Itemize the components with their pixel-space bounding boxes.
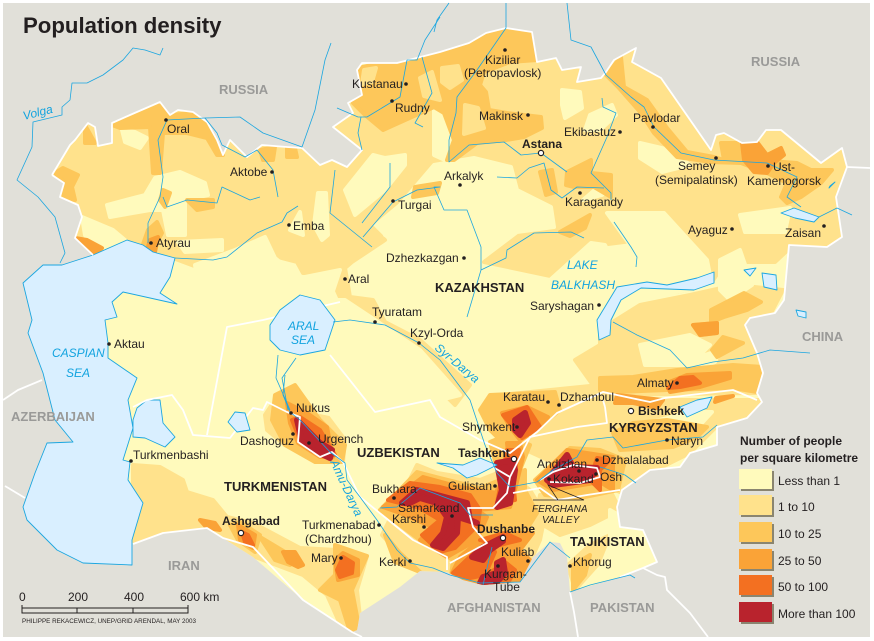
city labels: Samarkand bbox=[398, 501, 459, 515]
city labels: Aral bbox=[348, 272, 369, 286]
city labels: Dzhalalabad bbox=[602, 453, 669, 467]
city labels: Turkmenabad bbox=[302, 518, 376, 532]
water labels: Syr-Darya bbox=[432, 341, 483, 386]
title: Population density bbox=[23, 13, 222, 38]
capital markers bbox=[238, 150, 634, 541]
legend: 25 to 50: 25 to 50 bbox=[778, 554, 822, 568]
city labels: Aktobe bbox=[230, 165, 268, 179]
city labels: Aktau bbox=[114, 337, 145, 351]
city labels bbox=[114, 53, 822, 594]
city labels: Almaty bbox=[637, 376, 674, 390]
legend title: Number of people bbox=[740, 434, 842, 448]
capital labels: Bishkek bbox=[638, 404, 684, 418]
city labels: Tyuratam bbox=[372, 305, 422, 319]
scale bar: 200 bbox=[68, 590, 88, 604]
country name labels: TAJIKISTAN bbox=[570, 534, 645, 549]
country name labels: UZBEKISTAN bbox=[357, 445, 440, 460]
city labels: Saryshagan bbox=[530, 299, 594, 313]
city labels: Urgench bbox=[318, 432, 363, 446]
neighbouring country labels: RUSSIA bbox=[751, 54, 801, 69]
city labels: Zaisan bbox=[785, 226, 821, 240]
city labels: Turgai bbox=[398, 198, 432, 212]
lakes bbox=[228, 182, 835, 478]
city labels: Mary bbox=[311, 551, 338, 565]
scale bar: 400 bbox=[124, 590, 144, 604]
city labels: Rudny bbox=[395, 101, 430, 115]
garabogaz bay bbox=[133, 400, 175, 447]
city labels: Makinsk bbox=[479, 109, 524, 123]
legend bbox=[739, 434, 858, 624]
capital labels bbox=[222, 137, 684, 536]
city labels: Kzyl-Orda bbox=[410, 326, 464, 340]
legend: less than 1 bbox=[739, 469, 840, 491]
water labels bbox=[21, 102, 615, 519]
city labels: Dzhambul bbox=[560, 390, 614, 404]
legend: 1 to 10: 1 to 10 bbox=[778, 500, 815, 514]
city labels: Tube bbox=[493, 580, 520, 594]
water labels: ARAL bbox=[287, 319, 319, 333]
city labels: Andizhan bbox=[537, 457, 587, 471]
ferghana valley callout: FERGHANA bbox=[532, 504, 588, 515]
city labels: (Petropavlosk) bbox=[464, 66, 541, 80]
city labels: Nukus bbox=[296, 401, 330, 415]
city labels: Karshi bbox=[392, 512, 426, 526]
water labels: Amu-Darya bbox=[327, 456, 366, 519]
city labels: Kustanau bbox=[352, 77, 403, 91]
legend: 10 to 25: 10 to 25 bbox=[778, 527, 822, 541]
city labels: Dashoguz bbox=[240, 434, 294, 448]
city labels: Karatau bbox=[503, 390, 545, 404]
city labels: Khorug bbox=[573, 555, 612, 569]
legend: more than 100 bbox=[739, 602, 856, 624]
legend: 1 to 10 bbox=[739, 495, 815, 517]
density: more than 100 bbox=[297, 413, 597, 583]
caspian sea bbox=[23, 240, 177, 565]
capital labels: Dushanbe bbox=[477, 522, 535, 536]
density: less than 1 patches bbox=[82, 90, 790, 570]
capital labels: Astana bbox=[522, 137, 562, 151]
country name labels: KAZAKHSTAN bbox=[435, 280, 524, 295]
neighbouring country labels: AZERBAIJAN bbox=[11, 409, 95, 424]
ferghana valley callout bbox=[532, 485, 588, 526]
scale bar bbox=[19, 590, 219, 613]
capital labels: Ashgabad bbox=[222, 514, 280, 528]
city labels: Kerki bbox=[379, 555, 406, 569]
city labels: Ayaguz bbox=[688, 223, 728, 237]
legend: less than 1: Less than 1 bbox=[778, 474, 840, 488]
city labels: Karagandy bbox=[565, 195, 623, 209]
country name labels: TURKMENISTAN bbox=[224, 479, 327, 494]
neighbouring country labels: RUSSIA bbox=[219, 82, 269, 97]
city labels: Dzhezkazgan bbox=[386, 251, 459, 265]
city labels: Gulistan bbox=[448, 479, 492, 493]
water labels: CASPIAN bbox=[52, 346, 105, 360]
legend title: per square kilometre bbox=[740, 451, 858, 465]
scale bar: 600 km bbox=[180, 590, 219, 604]
density: 1 to 10 holes in the northern block bbox=[362, 66, 484, 134]
city labels: Kamenogorsk bbox=[747, 174, 822, 188]
city labels: Bukhara bbox=[372, 482, 417, 496]
legend: 50 to 100: 50 to 100 bbox=[778, 580, 828, 594]
water labels: Volga bbox=[21, 102, 54, 123]
city labels: Atyrau bbox=[156, 236, 191, 250]
city labels: Shymkent bbox=[462, 420, 516, 434]
city labels: Arkalyk bbox=[444, 169, 484, 183]
city labels: Ust- bbox=[773, 160, 795, 174]
country name labels: KYRGYZSTAN bbox=[609, 420, 698, 435]
water labels: LAKE bbox=[567, 258, 599, 272]
city markers bbox=[107, 48, 826, 568]
capital labels: Tashkent bbox=[458, 446, 510, 460]
neighbouring country labels: PAKISTAN bbox=[590, 600, 655, 615]
neighbouring country labels: CHINA bbox=[802, 329, 844, 344]
city labels: Kokand bbox=[553, 472, 594, 486]
city labels: Kiziliar bbox=[485, 53, 520, 67]
density: 25 to 50 bbox=[75, 133, 784, 585]
legend: 50 to 100 bbox=[739, 575, 828, 597]
city labels: Emba bbox=[293, 219, 325, 233]
city labels: Semey bbox=[678, 159, 715, 173]
legend: 25 to 50 bbox=[739, 549, 822, 571]
scale bar: 0 bbox=[19, 590, 26, 604]
neighbouring country labels: AFGHANISTAN bbox=[447, 600, 541, 615]
water labels: BALKHASH bbox=[551, 278, 615, 292]
water labels: SEA bbox=[291, 333, 315, 347]
country name labels bbox=[224, 280, 698, 549]
city labels: (Chardzhou) bbox=[305, 532, 372, 546]
city labels: Pavlodar bbox=[633, 111, 680, 125]
legend: 10 to 25 bbox=[739, 522, 822, 544]
city labels: (Semipalatinsk) bbox=[655, 173, 738, 187]
city labels: Turkmenbashi bbox=[133, 448, 209, 462]
water labels: SEA bbox=[66, 366, 90, 380]
density: 50 to 100 bbox=[242, 377, 700, 584]
city labels: Ekibastuz bbox=[564, 125, 616, 139]
credit: PHILIPPE REKACEWICZ, UNEP/GRID ARENDAL, MAY 2003 bbox=[22, 618, 197, 625]
city labels: Naryn bbox=[671, 434, 703, 448]
legend: more than 100: More than 100 bbox=[778, 607, 856, 621]
city labels: Kurgan- bbox=[484, 567, 527, 581]
city labels: Osh bbox=[600, 470, 622, 484]
neighbouring country labels: IRAN bbox=[168, 558, 200, 573]
ferghana valley callout: VALLEY bbox=[542, 515, 581, 526]
city labels: Kuliab bbox=[501, 545, 535, 559]
city labels: Oral bbox=[167, 122, 190, 136]
